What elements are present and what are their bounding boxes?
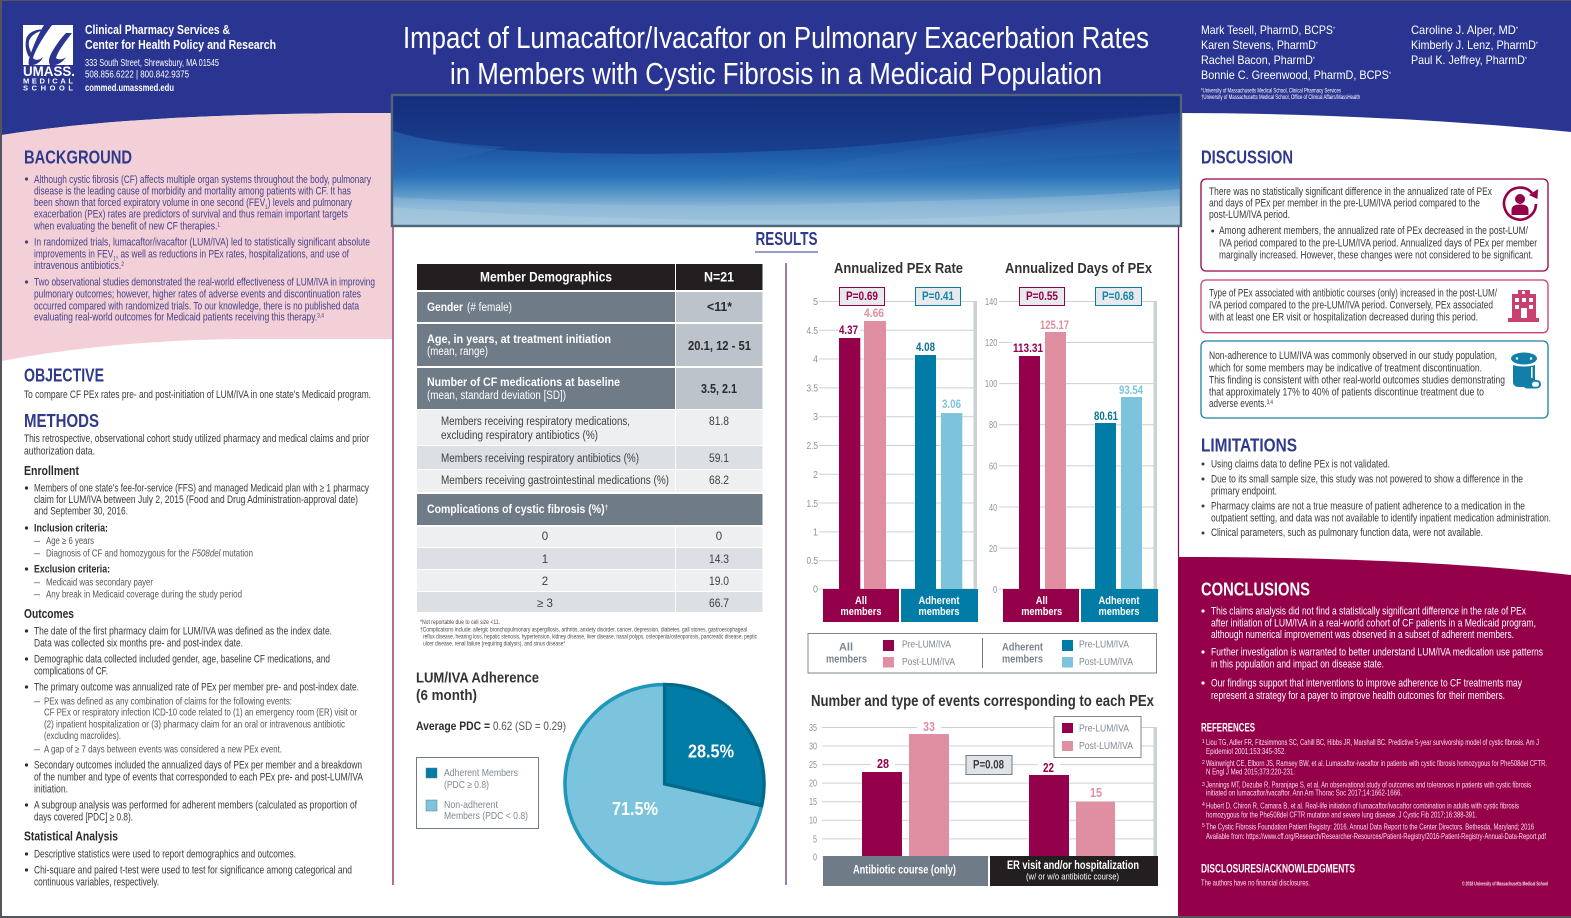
y axis labels: 4.5 (806, 326, 818, 337)
y axis labels: 40 (989, 503, 998, 514)
p-values: P=0.68 (1102, 291, 1135, 303)
logo: UMass Medical School (23, 25, 75, 93)
value labels: 93.54 (1119, 385, 1144, 397)
value labels: 125.17 (1040, 320, 1069, 332)
heading: results: RESULTS (756, 229, 818, 249)
organisation address (85, 23, 276, 94)
text block: background bullets: pulmonary outcomes; however, higher rates of adverse events and discontinuation rates (34, 289, 361, 301)
y axis labels: 140 (985, 297, 998, 308)
bar chart: number and type of events (809, 693, 1158, 886)
text block: methods intro: authorization data. (24, 445, 95, 457)
y axis labels: 25 (809, 760, 817, 771)
text block: references: 1 (1202, 739, 1205, 745)
text block: outcomes: initiation. (34, 784, 68, 796)
logo: UMass Medical School: UMASS. (23, 64, 75, 79)
authors: Paul K. Jeffrey, PharmD* (1411, 53, 1528, 67)
text block: outcomes: complications of CF. (34, 666, 108, 678)
text block: background bullets: been shown that forced expiratory volume in one second (FEV1) levels and pulmonary (34, 197, 353, 211)
legend: adherence: Non-adherent (444, 799, 498, 811)
value labels: 28 (877, 757, 889, 771)
icon: hospital (1508, 290, 1539, 322)
table: member demographics: 20.1, 12 - 51 (688, 339, 751, 353)
pie chart: adherence: 71.5% (612, 798, 658, 819)
value labels: 3.06 (942, 399, 961, 411)
heading: objective: OBJECTIVE (24, 365, 104, 386)
legend: adherence (416, 758, 538, 828)
text block: outcomes: A subgroup analysis was performed for adherent members (calculated as proportion of (34, 800, 357, 812)
value labels (871, 720, 1102, 800)
category labels: members (1098, 606, 1140, 618)
category labels: Antibiotic course (only) (853, 862, 956, 876)
p-values: P=0.55 (1026, 291, 1059, 303)
text block: statistical analysis: Descriptive statistics were used to report demographics and outcomes. (34, 849, 296, 861)
text block: enrollment: – (34, 549, 41, 560)
category labels (823, 856, 1158, 886)
text block: outcomes: Data was collected six months pre- and post-index date. (34, 638, 243, 650)
text block: enrollment (25, 483, 370, 601)
table: member demographics: Members receiving gastrointestinal medications (%) (441, 475, 669, 487)
table: member demographics: 66.7 (709, 598, 729, 610)
text block: outcomes: Demographic data collected included gender, age, baseline CF medications, and (34, 654, 330, 666)
y axis labels: 3.5 (806, 384, 818, 394)
sub-heading: enrollment: Enrollment (24, 463, 80, 478)
value labels (1012, 320, 1144, 423)
table: member demographics: (mean, range) (427, 346, 488, 358)
text block: references: initiated on lumacaftor/ivacaftor. Ann Am Thorac Soc 2017;14:1662-1666. (1206, 789, 1402, 798)
authors: †University of Massachusetts Medical School, Office of Clinical Affairs/MassHealth (1201, 95, 1360, 101)
y axis labels (809, 723, 817, 864)
table: member demographics: 14.3 (709, 554, 729, 566)
y axis labels: 0 (993, 585, 998, 596)
panel: limitations (1201, 435, 1551, 539)
table: member demographics: Gender (427, 300, 463, 314)
table: member demographics: (mean, standard deviation [SD]) (427, 390, 566, 402)
text block: outcomes: (excluding macrolides). (44, 731, 121, 742)
average PDC: Average PDC = (416, 719, 490, 733)
text block: background bullets: In randomized trials, lumacaftor/ivacaftor (LUM/IVA) led to statistically significant absolute (34, 237, 370, 249)
callout: non-adherence: adverse events.3,4 (1209, 398, 1274, 410)
icon: pill bottle (1511, 352, 1541, 388)
pie chart: adherence: 28.5% (688, 741, 734, 762)
callout: type of PEx: with at least one ER visit or hospitalization decreased during this period. (1208, 312, 1478, 324)
category labels: ER visit and/or hospitalization (1007, 858, 1139, 872)
text block: background bullets: exacerbation (PEx) rates are predictors of survival and thus remain important targets (34, 208, 348, 220)
legend: PEx charts: Pre-LUM/IVA (902, 639, 951, 651)
heading: adherence: LUM/IVA Adherence (416, 670, 539, 687)
table: member demographics: 2 (542, 576, 548, 588)
text block: enrollment: Members of one state's fee-for-service (FFS) and managed Medicaid plan with ≥ 1 pharmacy (34, 483, 370, 495)
text block: enrollment: claim for LUM/IVA between July 2, 2015 (Food and Drug Administration-approval date) (34, 494, 358, 506)
legend (1054, 716, 1141, 758)
authors: Bonnie C. Greenwood, PharmD, BCPS* (1201, 68, 1392, 82)
legend: PEx charts: Post-LUM/IVA (902, 656, 955, 668)
text block: enrollment: – (34, 536, 41, 547)
text block: outcomes: of the number and type of events that corresponded to each PEx pre- and post-LUM/IVA (34, 772, 364, 784)
table: member demographics: Complications of cystic fibrosis (%)† (427, 502, 608, 516)
text block: background bullets: when evaluating the benefit of new CF therapies.1 (33, 220, 221, 232)
table: member demographics (417, 264, 762, 612)
organisation address: Clinical Pharmacy Services & (85, 23, 230, 37)
table: member demographics: 81.8 (709, 416, 729, 428)
table: member demographics: Number of CF medications at baseline (427, 375, 620, 389)
heading: conclusions: CONCLUSIONS (1201, 578, 1310, 600)
table: member demographics: Member Demographics (480, 269, 612, 285)
value labels: 80.61 (1094, 411, 1119, 423)
category labels: members (1021, 606, 1062, 618)
text block: background bullets: Two observational studies demonstrated the real-world effectiveness of LUM/IVA in improving (34, 277, 375, 289)
panel: conclusions (1201, 578, 1548, 888)
value labels: 22 (1043, 761, 1054, 775)
text block: enrollment: Age ≥ 6 years (46, 536, 94, 547)
callout: non-adherence: that approximately 17% to 40% of patients discontinue treatment due to (1209, 387, 1484, 399)
category labels (823, 589, 978, 622)
y axis labels: 35 (809, 723, 817, 734)
legend: PEx charts: Pre-LUM/IVA (1079, 639, 1129, 651)
text block: enrollment: – (34, 578, 41, 589)
bar chart: annualized PEx rate (806, 261, 978, 622)
header band (2, 1, 1571, 135)
table footnotes: reflux disease, hearing loss, hepatic stenosis, hypertension, kidney disease, liver disease, nasal polyps, osteopenia/osteoporosis, pancreatic disease, peptic (423, 634, 758, 641)
logo: UMass Medical School: MEDICAL (23, 76, 73, 86)
text block: enrollment: – (34, 590, 41, 601)
text block: outcomes: – (34, 745, 41, 756)
value labels: 4.08 (916, 342, 936, 354)
bars (839, 321, 962, 589)
text block: outcomes: (2) inpatient hospitalization or (3) pharmacy claim for an oral or intravenous antibiotic (44, 720, 345, 731)
y axis labels: 4 (813, 354, 818, 366)
legend: PEx charts: members (826, 654, 867, 666)
heading: disclosures: DISCLOSURES/ACKNOWLEDGMENTS (1201, 863, 1355, 875)
sub-heading: statistical analysis: Statistical Analysis (24, 829, 118, 844)
title: in Members with Cystic Fibrosis in a Medicaid Population (450, 56, 1102, 91)
heading: discussion: DISCUSSION (1201, 146, 1293, 168)
legend: PEx charts: Adherent (1002, 642, 1043, 654)
text block: background bullets: evaluating real-world outcomes for Medicaid patients receiving this therapy.3,4 (34, 312, 325, 324)
authors: Karen Stevens, PharmD* (1201, 38, 1319, 52)
heading: methods: METHODS (24, 410, 99, 431)
average PDC (416, 719, 566, 733)
callout: no significant difference: and days of PEx per member in the pre-LUM/IVA period compared to the (1209, 198, 1480, 210)
table: member demographics: 0 (716, 531, 722, 543)
text block: outcomes: The primary outcome was annualized rate of PEx per member pre- and post-index date. (34, 682, 359, 694)
y axis labels: 2 (813, 470, 818, 481)
p-values (840, 288, 960, 306)
title (403, 20, 1149, 91)
category labels: All (855, 595, 867, 607)
text block: enrollment: and September 30, 2016. (34, 506, 128, 518)
y axis labels: 120 (985, 338, 998, 349)
text block: background bullets: Although cystic fibrosis (CF) affects multiple organ systems throughout the body, pulmonary (34, 174, 372, 186)
y axis labels (806, 297, 818, 596)
category labels: members (840, 606, 882, 618)
y axis labels: 30 (809, 742, 817, 752)
table: member demographics: Age, in years, at treatment initiation (427, 332, 611, 346)
legend: PEx charts: Post-LUM/IVA (1079, 656, 1133, 668)
p-values: P=0.69 (846, 291, 878, 303)
text block: background bullets: occurred compared with randomized trials. To our knowledge, there is no published data (34, 301, 359, 313)
callout: type of PEx (1201, 280, 1548, 333)
callout: no significant difference: There was no statistically significant difference in the annualized rate of PEx (1209, 186, 1493, 198)
callout: type of PEx: IVA period compared to the pre-LUM/IVA period. Conversely, PEx associated (1209, 300, 1493, 312)
text block: references: Epidemiol 2001;153:345-352. (1206, 747, 1286, 756)
text block: statistical analysis: Chi-square and paired t-test were used to test for significance among categorical and (34, 865, 352, 877)
y axis labels: 20 (809, 778, 817, 790)
text block: outcomes: Secondary outcomes included the annualized days of PEx per member and a breakdown (34, 760, 362, 772)
pie chart: adherence (565, 684, 764, 884)
authors: Rachel Bacon, PharmD* (1201, 53, 1316, 67)
panel: background shading (2, 113, 392, 361)
legend: PEx charts (808, 634, 1156, 673)
legend: Pre-LUM/IVA (1079, 723, 1129, 735)
text block: outcomes: – (34, 697, 41, 708)
text block: limitations: primary endpoint. (1211, 486, 1277, 498)
text block: enrollment: Medicaid was secondary payer (46, 578, 154, 589)
table: member demographics: 0 (542, 531, 548, 543)
y axis labels: 1 (813, 528, 818, 538)
p-values: P=0.41 (922, 291, 955, 303)
text block: outcomes: CF PEx or respiratory infection ICD-10 code related to (1) an emergency room (ER) visit or (44, 708, 358, 719)
table: member demographics: excluding respiratory antibiotics (%) (441, 430, 598, 442)
y axis labels (985, 297, 998, 596)
y axis labels: 0 (813, 852, 817, 864)
heading: results (755, 229, 818, 252)
legend: PEx charts: members (1002, 654, 1043, 666)
heading: references: REFERENCES (1201, 723, 1255, 735)
text block: statistical analysis: continuous variables, respectively. (34, 877, 159, 889)
legend: Post-LUM/IVA (1079, 740, 1133, 752)
y axis labels: 5 (813, 834, 817, 846)
y axis labels: 0 (813, 584, 818, 596)
organisation address: Center for Health Policy and Research (85, 38, 276, 52)
y axis labels: 20 (989, 544, 998, 555)
y axis labels: 1.5 (806, 499, 818, 510)
authors: Mark Tesell, PharmD, BCPS* (1201, 23, 1336, 37)
y axis labels: 100 (985, 379, 998, 390)
y axis labels: 0.5 (806, 556, 818, 567)
authors: Caroline J. Alper, MD* (1411, 23, 1519, 37)
p-values (1020, 288, 1142, 306)
table: member demographics: 1 (542, 554, 548, 566)
heading: limitations: LIMITATIONS (1201, 435, 1297, 456)
legend: adherence: Members (PDC < 0.8) (444, 810, 528, 822)
text block: limitations: Using claims data to define PEx is not validated. (1211, 458, 1390, 470)
bars (862, 734, 1115, 857)
text block: outcomes: A gap of ≥ 7 days between events was considered a new PEx event. (44, 745, 282, 756)
chart title: Annualized Days of PEx (1005, 261, 1152, 277)
text block: references: N Engl J Med 2015;373:220-231. (1206, 767, 1295, 776)
y axis labels: 15 (809, 797, 817, 808)
authors: *University of Massachusetts Medical School, Clinical Pharmacy Services (1201, 88, 1341, 94)
category labels (1003, 589, 1158, 622)
text block: background bullets (25, 174, 375, 324)
results column rules (393, 226, 1178, 885)
table: member demographics: Members receiving respiratory medications, (441, 416, 630, 428)
callout: non-adherence: Non-adherence to LUM/IVA was commonly observed in our study population, (1209, 350, 1497, 362)
table: member demographics: N=21 (704, 269, 734, 285)
category labels: members (918, 606, 960, 618)
table footnotes: ulcer disease, renal failure (requiring dialysis), and sinus disease4 (423, 639, 566, 647)
panel: objective (24, 365, 371, 401)
y axis labels: 3 (813, 412, 818, 423)
heading: adherence (416, 670, 539, 704)
table: member demographics: 59.1 (709, 453, 729, 465)
y axis labels: 80 (989, 420, 998, 431)
table: member demographics: Members receiving respiratory antibiotics (%) (441, 453, 639, 465)
table: member demographics: (# female) (467, 302, 512, 314)
value labels: 15 (1090, 786, 1102, 800)
y axis labels: 60 (989, 462, 998, 472)
category labels: All (1036, 595, 1048, 607)
text block: limitations: Clinical parameters, such as pulmonary function data, were not available. (1211, 527, 1483, 539)
text block: references: 4 (1202, 802, 1205, 808)
icon: person with cycle arrow (1504, 188, 1538, 220)
bars (1019, 332, 1142, 589)
table footnotes (420, 619, 758, 647)
table: member demographics: 3.5, 2.1 (701, 382, 737, 396)
authors (1201, 23, 1539, 101)
text block: references: 2 (1202, 760, 1205, 766)
text block: references: 3 (1202, 782, 1205, 788)
chart title: Number and type of events corresponding to each PEx (811, 693, 1154, 710)
text block: objective: To compare CF PEx rates pre- and post-initiation of LUM/IVA in one state's Medicaid program. (24, 389, 371, 401)
panel: LUM/IVA adherence (416, 670, 764, 884)
text block: disclosures: The authors have no financial disclosures. (1201, 879, 1310, 888)
title: Impact of Lumacaftor/Ivacaftor on Pulmonary Exacerbation Rates (403, 20, 1149, 55)
text block: background bullets: improvements in FEV1, as well as reductions in PEx rates, hospitalizations, and use of (34, 249, 349, 263)
text block: statistical analysis (25, 849, 352, 889)
y axis labels: 2.5 (806, 441, 818, 452)
value labels: 4.66 (864, 308, 884, 320)
text block: enrollment: Any break in Medicaid coverage during the study period (46, 590, 242, 601)
panel: discussion (1201, 146, 1548, 418)
text block: enrollment: Exclusion criteria: (34, 564, 110, 576)
text block: methods intro (24, 433, 369, 457)
callout: non-adherence: This finding is consistent with other real-world outcomes studies demonstrating (1209, 375, 1505, 387)
text block: outcomes (25, 626, 364, 824)
callout: no significant difference (1201, 179, 1548, 271)
panel: conclusions shading (1178, 557, 1571, 916)
heading: background: BACKGROUND (24, 146, 132, 168)
value labels (838, 308, 961, 411)
chart title: Annualized PEx Rate (834, 261, 963, 277)
table footnotes: *Not reportable due to cell size <11. (420, 619, 500, 626)
average PDC: 0.62 (SD = 0.29) (493, 719, 566, 733)
text block: background bullets: intravenous antibiotics.2 (34, 260, 125, 272)
text block: conclusions (1201, 605, 1543, 702)
banner image (392, 95, 1181, 226)
legend: PEx charts: All (839, 642, 853, 654)
organisation address: 333 South Street, Shrewsbury, MA 01545 (85, 58, 219, 69)
text block: outcomes: days covered [PDC] ≥ 0.8). (34, 812, 133, 824)
sub-heading: outcomes: Outcomes (24, 606, 74, 621)
logo: UMass Medical School: SCHOOL (23, 84, 73, 93)
callout: non-adherence: which for some members may be indicative of treatment discontinuation. (1208, 363, 1482, 375)
text block: limitations (1202, 458, 1551, 539)
legend: adherence: Adherent Members (444, 767, 518, 779)
callout: non-adherence (1201, 341, 1548, 418)
table footnotes: †Complications include: allergic bronchopulmonary aspergillosis, arthritis, anxiety disorder, cancer, depression, diabetes, gall stones, gastroesophageal (420, 627, 747, 634)
text block: references: homozygous for the Phe508del CFTR mutation and severe lung disease. J Cystic Fib 2017;16:388-391. (1206, 810, 1477, 819)
category labels: (w/ or w/o antibiotic course) (1026, 871, 1119, 882)
text block: references (1202, 738, 1547, 841)
legend: adherence: (PDC ≥ 0.8) (444, 779, 489, 791)
category labels: Adherent (918, 595, 960, 607)
panel: background (24, 146, 375, 324)
y axis labels: 10 (809, 816, 817, 826)
y axis labels: 5 (813, 297, 818, 308)
text block: outcomes: The date of the first pharmacy claim for LUM/IVA was defined as the index date. (34, 626, 332, 638)
panel: methods (24, 410, 370, 889)
text block: outcomes: PEx was defined as any combination of claims for the following events: (44, 697, 292, 708)
text block: enrollment: Inclusion criteria: (34, 523, 108, 535)
category labels: Adherent (1098, 595, 1140, 607)
table: member demographics: <11* (707, 300, 732, 314)
text block: methods intro: This retrospective, observational cohort study utilized pharmacy and medical claims and prior (24, 433, 369, 445)
p-value: P=0.08 (973, 758, 1004, 772)
bar chart: annualized days of PEx (985, 261, 1158, 622)
text block: conclusions: in this population and impact on disease state. (1211, 659, 1384, 671)
table: member demographics: 19.0 (709, 576, 729, 588)
organisation address: 508.856.6222 | 800.842.9375 (85, 70, 189, 81)
table: member demographics: ≥ 3 (537, 598, 553, 610)
table: member demographics: 68.2 (709, 475, 729, 487)
callout: no significant difference: post-LUM/IVA period. (1209, 209, 1290, 221)
p-value (966, 756, 1012, 774)
text block: enrollment: Diagnosis of CF and homozygous for the F508del mutation (46, 549, 253, 560)
authors: Kimberly J. Lenz, PharmD* (1411, 38, 1539, 52)
text block: references: 5 (1202, 823, 1205, 829)
organisation address: commed.umassmed.edu (85, 83, 174, 94)
heading: adherence: (6 month) (416, 687, 477, 704)
value labels: 4.37 (839, 325, 858, 337)
text block: background bullets: disease is the leading cause of morbidity and mortality among patients with CF. It has (34, 186, 351, 198)
value labels: 33 (923, 720, 935, 734)
value labels: 113.31 (1013, 343, 1044, 355)
